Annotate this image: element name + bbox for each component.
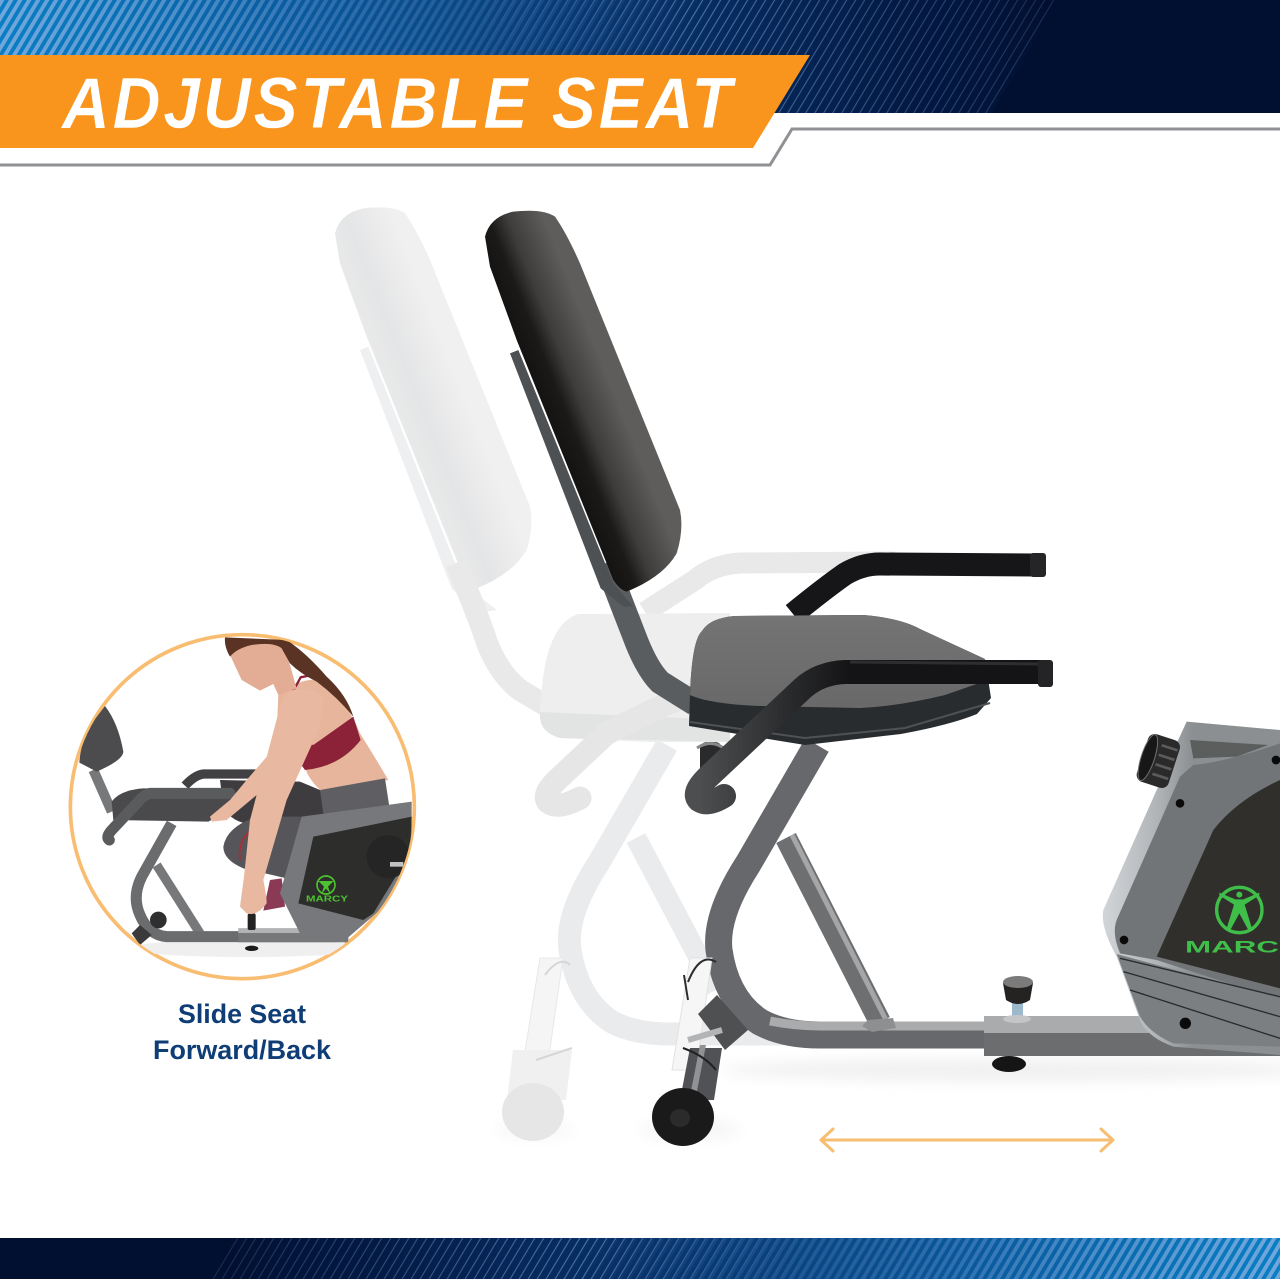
inset console: MARCY [306,895,349,904]
resistance console [1103,722,1280,1055]
backrest cushion [485,211,681,607]
caption: Slide Seat [178,999,306,1029]
ghost backrest [335,207,531,613]
title banner [0,55,810,148]
direction arrow [821,1129,1113,1151]
floor shadows [495,1059,1280,1139]
inset chair [79,706,348,951]
caption: Forward/Back [153,1035,332,1065]
far armrest [793,564,1035,614]
caption [153,999,332,1065]
console dark panel [1157,780,1280,988]
footer band [0,1238,1280,1279]
near armrest [697,660,1053,802]
ghost far handle [645,562,895,612]
inset console [280,802,412,942]
logo: Marcy [1185,887,1280,956]
adjustment knob [1003,976,1033,1023]
ghost frame tubes [456,563,545,705]
console bolts [1120,756,1280,1029]
inset floor shadow [140,942,346,957]
tension knob [1134,732,1182,790]
logo: Marcy: MARCY [1185,937,1280,956]
title: ADJUSTABLE SEAT [60,62,737,144]
end cap far armrest [1030,553,1046,577]
seat support frame [719,745,990,1035]
seat cushion [689,615,991,745]
backrest support tube [606,563,695,704]
inset woman head [225,637,353,717]
inset woman arms [210,689,312,914]
ghost seat cushion [540,613,730,742]
tube sleeve with knob and foot [984,976,1280,1072]
seat slide clamp [697,742,726,778]
ghost seat: rear position [335,207,895,1141]
header white step with grey rule [0,113,1280,165]
inset woman legs [220,780,327,911]
header background band [0,0,1280,113]
main seat assembly [485,211,1053,1146]
inset woman torso [277,675,389,815]
levelling foot [992,1056,1026,1072]
ghost near handle [546,692,700,805]
rear stabilizer bar and end cap [652,958,748,1146]
ghost roller [502,958,572,1141]
inset photo: woman adjusting seat [70,635,414,979]
